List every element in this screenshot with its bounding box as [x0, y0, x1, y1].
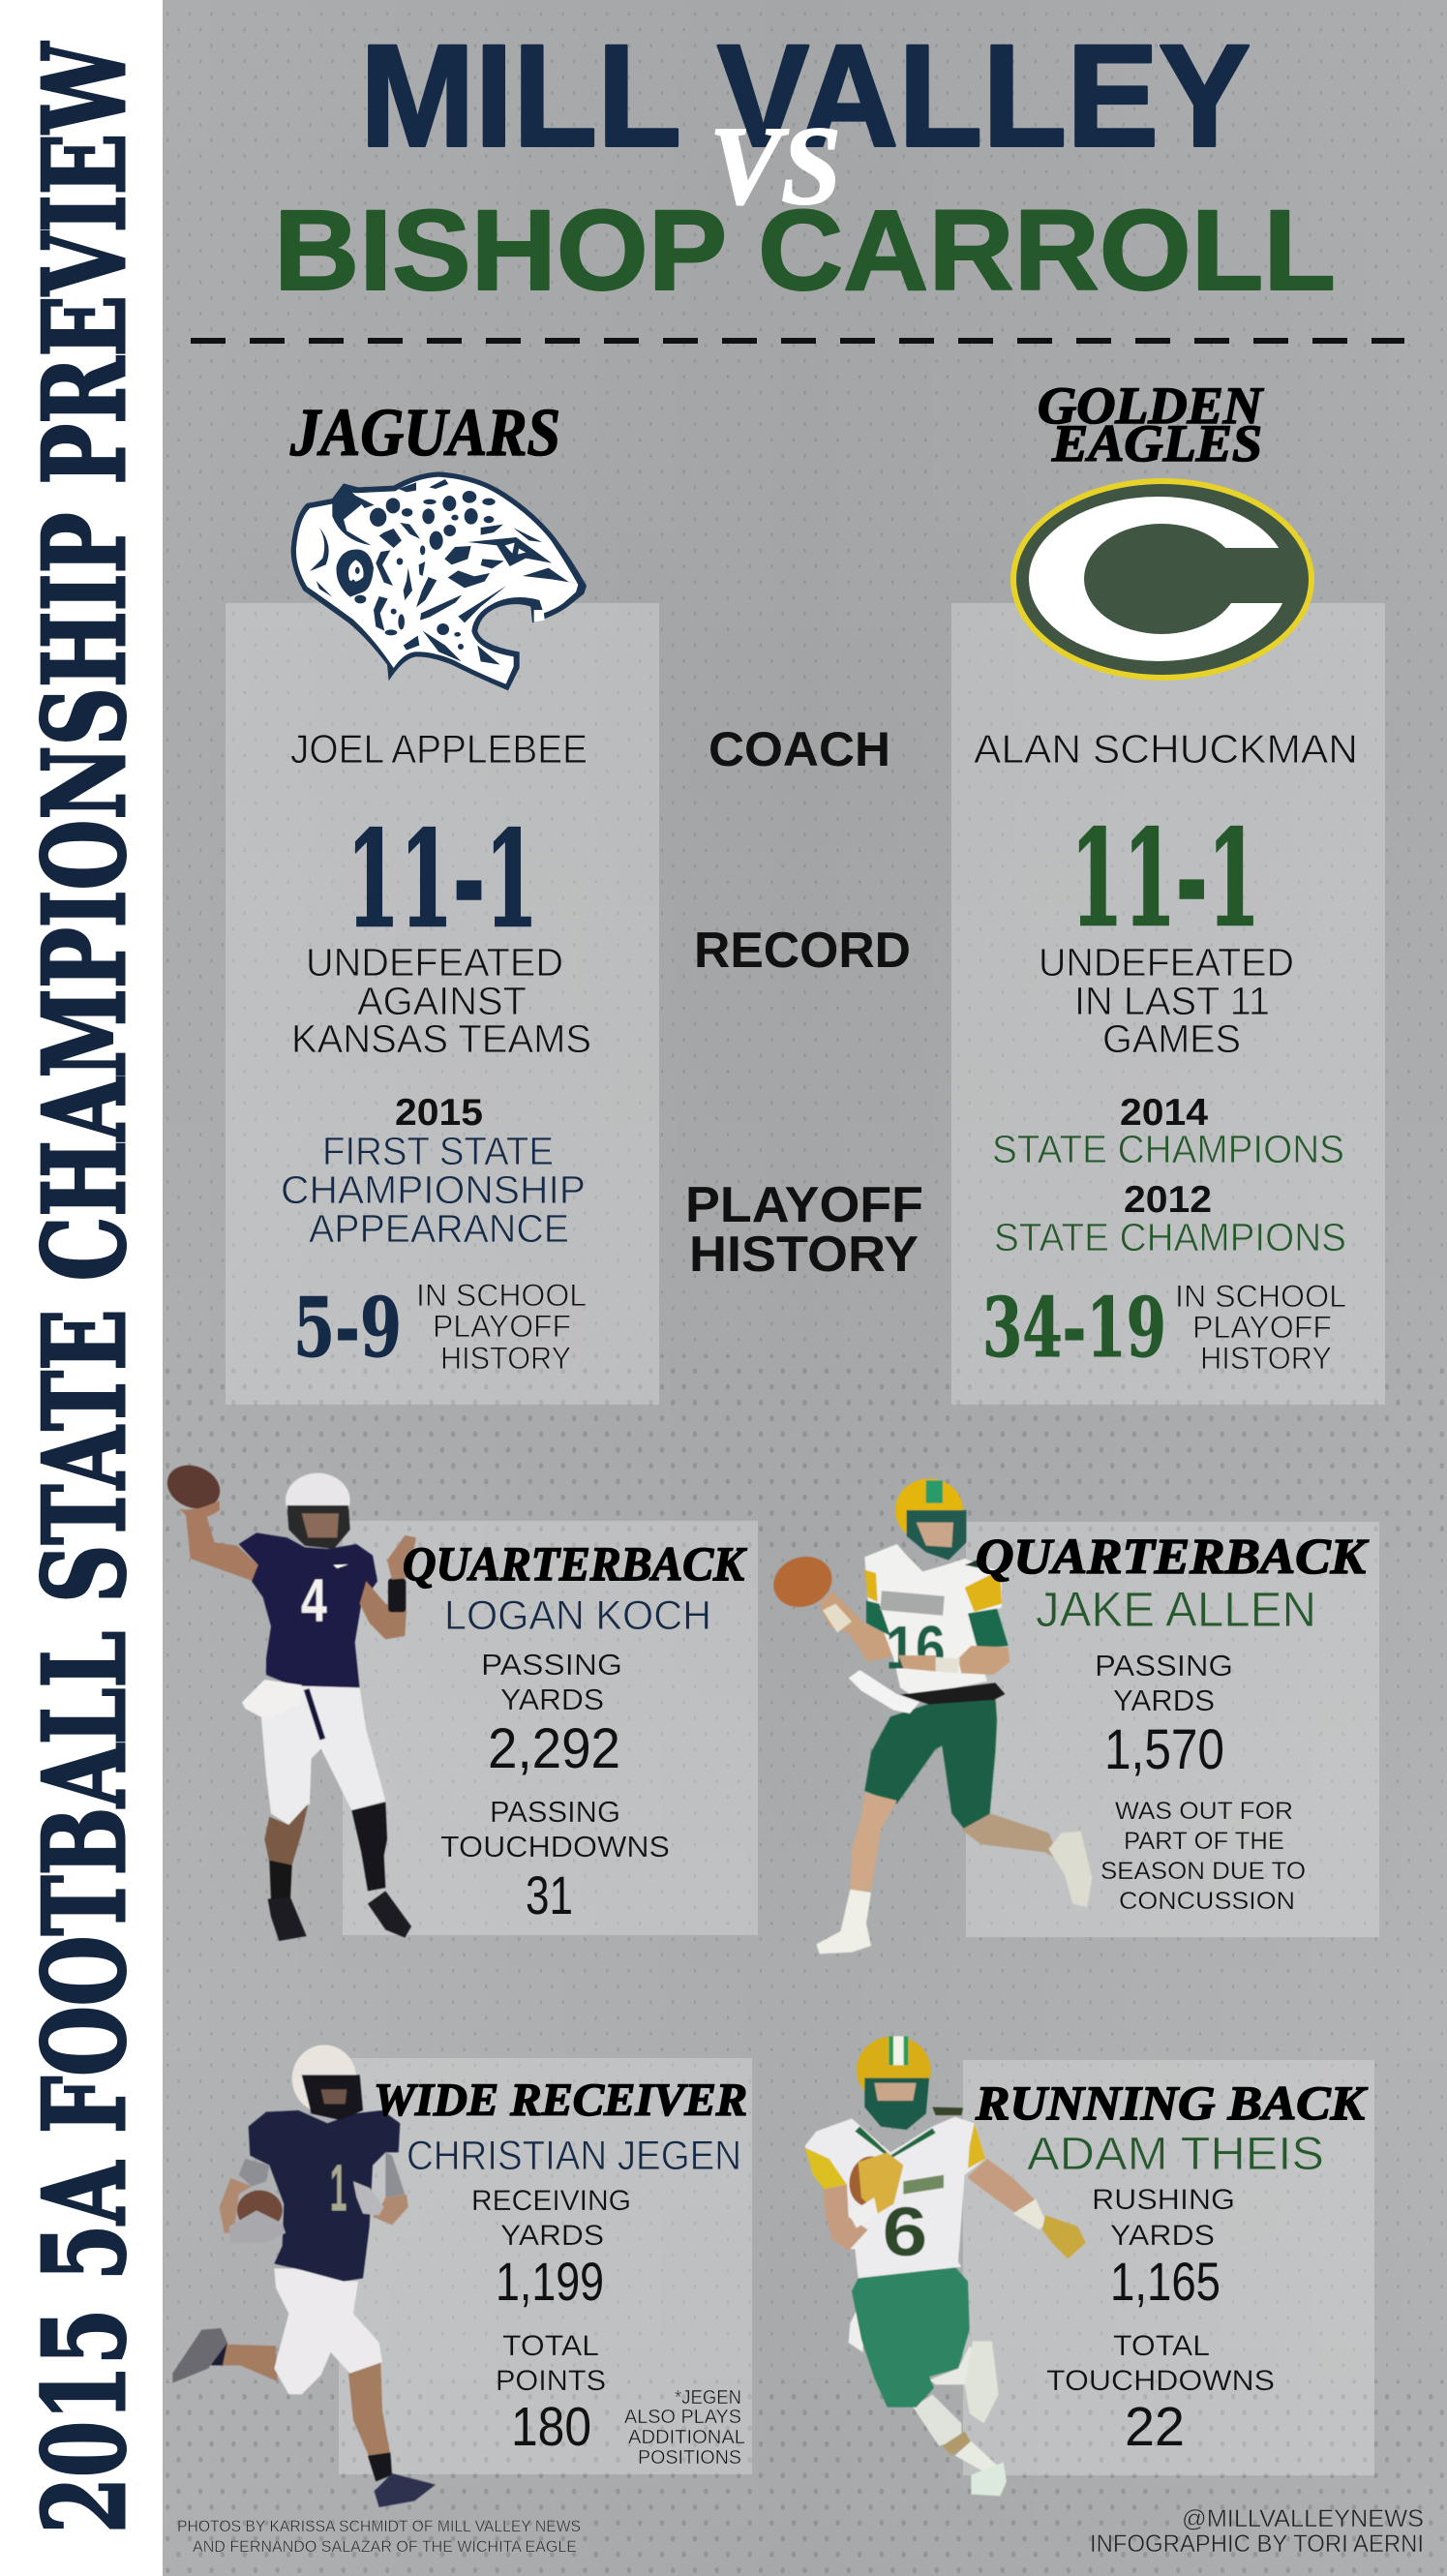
playoff note	[281, 1129, 586, 1251]
record number: 11-1	[347, 803, 538, 957]
note: SEASON DUE TO	[1100, 1858, 1306, 1885]
dashed divider	[191, 338, 1404, 344]
stat value: 1,570	[1104, 1718, 1224, 1781]
photo credits: AND FERNANDO SALAZAR OF THE WICHITA EAGLE	[193, 2537, 577, 2556]
record note	[1039, 940, 1294, 1061]
Logan Koch stats	[403, 1536, 747, 1925]
playoff record: 5-9	[293, 1280, 402, 1376]
playoff record note	[1175, 1279, 1346, 1376]
playoff record note: PLAYOFF	[433, 1309, 571, 1344]
panel: Adam Theis	[963, 2060, 1374, 2475]
coach name: ALAN SCHUCKMAN	[974, 726, 1358, 772]
playoff note: FIRST STATE	[322, 1129, 554, 1173]
stat value: 180	[511, 2396, 591, 2458]
panel: Logan Koch	[343, 1521, 758, 1935]
stat label	[481, 1648, 622, 1716]
playoff record note: IN SCHOOL	[1175, 1279, 1346, 1314]
photo: Jake Allen: 16	[886, 1614, 946, 1682]
row labels	[685, 722, 923, 1283]
title: Bishop Carroll: BISHOP CARROLL	[274, 187, 1336, 315]
playoff record: 34-19	[982, 1280, 1166, 1376]
Adam Theis stats	[975, 2076, 1369, 2458]
photo credits	[177, 2517, 581, 2556]
stat value: 1,165	[1110, 2251, 1221, 2312]
icon: jaguar logo	[291, 471, 587, 690]
position: WIDE RECEIVER	[374, 2075, 747, 2126]
record note: UNDEFEATED	[306, 940, 563, 985]
player name: ADAM THEIS	[1027, 2129, 1324, 2180]
icon: Bishop Carroll C logo	[1010, 478, 1314, 681]
footnote	[624, 2387, 745, 2469]
stat label	[440, 1795, 670, 1864]
year: 2015	[395, 1092, 483, 1134]
panel: Jake Allen	[966, 1522, 1379, 1937]
stat label: TOUCHDOWNS	[440, 1830, 670, 1864]
stat label	[1046, 2330, 1275, 2397]
playoff record note: HISTORY	[440, 1341, 571, 1376]
photo: Christian Jegen	[172, 2045, 436, 2507]
position: RUNNING BACK	[975, 2076, 1369, 2130]
year 2012: 2012	[1124, 1179, 1212, 1221]
record note: UNDEFEATED	[1039, 940, 1294, 985]
Christian Jegen stats	[374, 2075, 747, 2469]
footnote: *JEGEN	[675, 2387, 741, 2409]
photo: Adam Theis: 6	[883, 2194, 927, 2271]
stat value: 1,199	[496, 2251, 604, 2312]
coach name: JOEL APPLEBEE	[290, 726, 588, 772]
stat value: 2,292	[488, 1717, 620, 1780]
stat label	[496, 2330, 606, 2397]
stat label: YARDS	[500, 2220, 604, 2252]
footnote: POSITIONS	[638, 2447, 741, 2469]
stat label: YARDS	[1113, 1683, 1215, 1717]
title	[274, 14, 1336, 315]
position: QUARTERBACK	[976, 1530, 1369, 1585]
stat value: 22	[1125, 2396, 1185, 2458]
note: CONCUSSION	[1119, 1888, 1295, 1915]
label: History: HISTORY	[689, 1227, 919, 1283]
stat label: PASSING	[1095, 1649, 1233, 1682]
record note: AGAINST	[357, 979, 527, 1023]
photo: Adam Theis	[805, 2036, 1086, 2496]
championship 2014: STATE CHAMPIONS	[992, 1127, 1344, 1171]
record note: IN LAST 11	[1074, 979, 1270, 1023]
photo: Christian Jegen: 1	[330, 2151, 347, 2225]
stat label	[1092, 2184, 1235, 2252]
stat label: PASSING	[481, 1648, 622, 1682]
heading: Jaguars: JAGUARS	[289, 396, 560, 470]
title: Mill Valley: MILL VALLEY	[360, 14, 1251, 176]
title: vs: VS	[709, 105, 841, 228]
stat label	[471, 2185, 631, 2252]
label: Playoff: PLAYOFF	[685, 1177, 923, 1233]
record note: KANSAS TEAMS	[291, 1016, 591, 1061]
heading: Golden Eagles: EAGLES	[1051, 414, 1262, 472]
infographic credits	[1090, 2505, 1424, 2558]
stat label: PASSING	[490, 1795, 620, 1829]
heading: Golden Eagles	[1038, 377, 1264, 472]
stat label: TOTAL	[1113, 2330, 1210, 2362]
heading: Golden Eagles: GOLDEN	[1038, 377, 1264, 435]
sidebar	[0, 0, 163, 2576]
stat label: RUSHING	[1092, 2184, 1235, 2216]
year 2014: 2014	[1120, 1092, 1208, 1134]
playoff note: APPEARANCE	[309, 1206, 569, 1251]
stat label: RECEIVING	[471, 2185, 631, 2217]
photo: Jake Allen	[767, 1478, 1092, 1954]
note: WAS OUT FOR	[1115, 1798, 1293, 1825]
player name: JAKE ALLEN	[1036, 1582, 1316, 1637]
playoff record note	[416, 1278, 587, 1376]
footnote: ADDITIONAL	[628, 2427, 745, 2448]
stat label: TOTAL	[502, 2330, 599, 2362]
note: PART OF THE	[1124, 1828, 1284, 1855]
Mill Valley stats	[281, 726, 591, 1376]
Jake Allen stats	[976, 1530, 1369, 1915]
stat label: TOUCHDOWNS	[1046, 2365, 1275, 2397]
Bishop Carroll stats	[974, 726, 1358, 1376]
stat value: 31	[526, 1864, 573, 1925]
label: Record: RECORD	[694, 923, 911, 979]
label: Coach: COACH	[708, 722, 890, 776]
championship 2012: STATE CHAMPIONS	[994, 1215, 1346, 1259]
stat label	[1095, 1649, 1233, 1717]
infographic credits: @MILLVALLEYNEWS	[1182, 2505, 1424, 2532]
infographic credits: INFOGRAPHIC BY TORI AERNI	[1090, 2531, 1424, 2558]
photo: Logan Koch	[161, 1458, 416, 1941]
photo: Logan Koch: 4	[301, 1567, 327, 1635]
stat label: POINTS	[496, 2365, 606, 2397]
record note	[291, 940, 591, 1061]
stat label: YARDS	[1110, 2220, 1215, 2252]
playoff record note: HISTORY	[1200, 1341, 1332, 1376]
record number: 11-1	[1070, 802, 1260, 956]
position: QUARTERBACK	[403, 1536, 747, 1591]
panel: Bishop Carroll team	[951, 603, 1385, 1405]
panel: Christian Jegen	[339, 2058, 752, 2474]
player name: LOGAN KOCH	[444, 1592, 711, 1639]
player name: CHRISTIAN JEGEN	[407, 2133, 741, 2179]
footnote: ALSO PLAYS	[624, 2407, 741, 2428]
stat label: YARDS	[500, 1682, 604, 1716]
panel: Mill Valley team	[226, 603, 659, 1405]
playoff note: CHAMPIONSHIP	[281, 1167, 586, 1212]
note	[1100, 1798, 1306, 1915]
playoff record note: IN SCHOOL	[416, 1278, 587, 1313]
record note: GAMES	[1102, 1016, 1241, 1061]
photo credits: PHOTOS BY KARISSA SCHMIDT OF MILL VALLEY NEWS	[177, 2517, 581, 2535]
playoff record note: PLAYOFF	[1192, 1310, 1332, 1345]
